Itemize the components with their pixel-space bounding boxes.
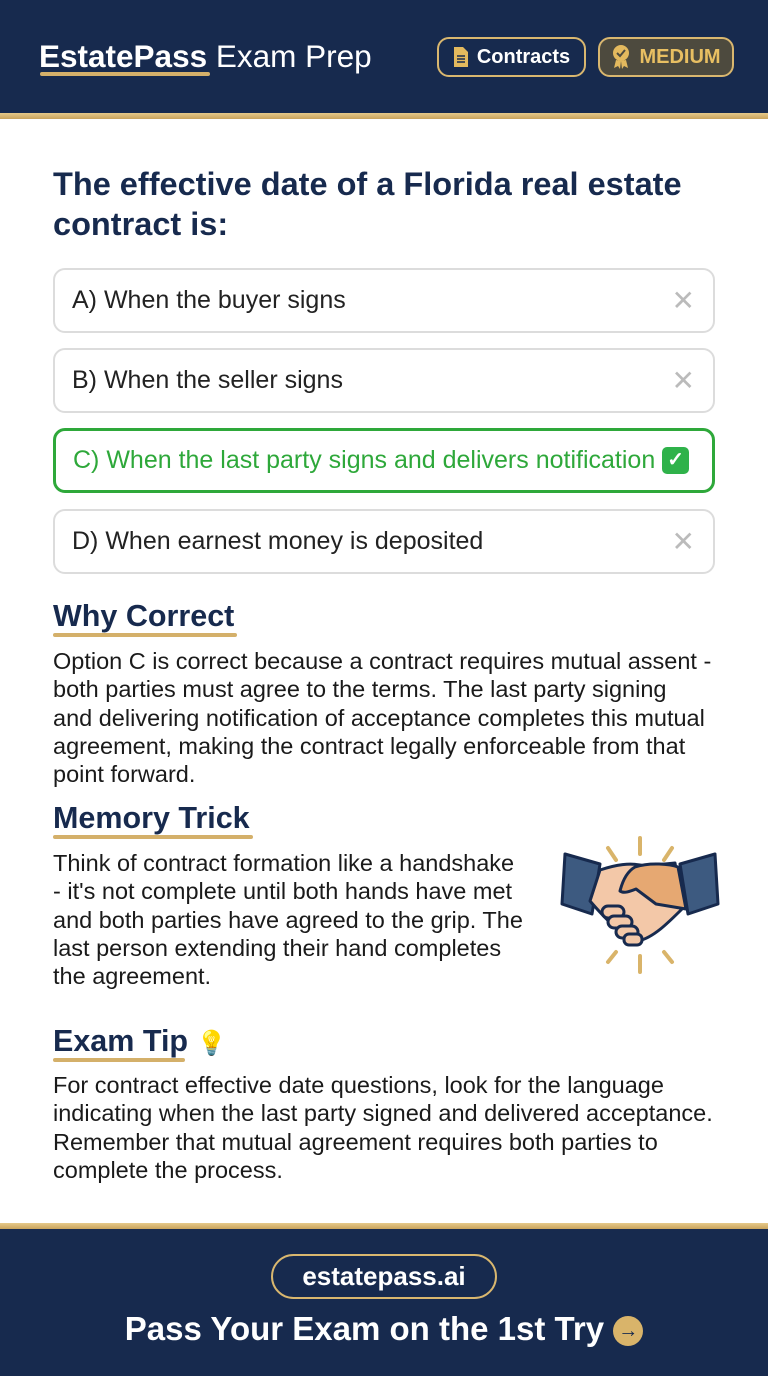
badge: medium: MEDIUM xyxy=(639,46,721,68)
heading: why correct: Why Correct xyxy=(53,599,234,633)
text: why correct: point forward. xyxy=(53,761,195,787)
text: exam tip: Remember that mutual agreement requires both parties to xyxy=(53,1129,658,1155)
url pill xyxy=(271,1254,497,1299)
question heading: The effective date of a Florida real estate xyxy=(53,166,682,202)
option C correct: ✓ xyxy=(667,449,684,471)
option C correct xyxy=(53,428,715,493)
option A: ✕ xyxy=(672,285,695,316)
text: why correct: both parties must agree to the terms. The last party signing xyxy=(53,676,666,702)
question heading: contract is: xyxy=(53,206,228,242)
text: exam tip: complete the process. xyxy=(53,1157,283,1183)
option D xyxy=(53,509,715,574)
option B: B) When the seller signs xyxy=(72,366,343,394)
text: memory trick: Think of contract formation like a handshake xyxy=(53,850,514,876)
text: memory trick: - it's not complete until both hands have met xyxy=(53,878,512,904)
text: exam tip: indicating when the last party signed and delivered acceptance. xyxy=(53,1100,713,1126)
logo underline xyxy=(40,72,210,76)
text: exam tip xyxy=(53,1072,713,1183)
option B xyxy=(53,348,715,413)
badge: contracts: Contracts xyxy=(477,46,570,68)
heading: exam tip: Exam Tip 💡 xyxy=(53,1024,226,1058)
tagline: Pass Your Exam on the 1st Try xyxy=(125,1310,604,1347)
badge: contracts xyxy=(437,37,586,77)
url pill: estatepass.ai xyxy=(302,1261,466,1291)
text: exam tip: For contract effective date questions, look for the language xyxy=(53,1072,664,1098)
badge: medium xyxy=(598,37,734,77)
header bar xyxy=(0,0,768,113)
text: memory trick: the agreement. xyxy=(53,963,211,989)
text: memory trick: and both parties have agreed to the grip. The xyxy=(53,907,523,933)
icon: handshake xyxy=(560,836,720,974)
tagline: → xyxy=(618,1320,638,1342)
text: why correct: Option C is correct because a contract requires mutual assent - xyxy=(53,648,711,674)
heading: memory trick: Memory Trick xyxy=(53,801,250,835)
option D: ✕ xyxy=(672,526,695,557)
text: why correct: and delivering notification of acceptance completes this mutual xyxy=(53,705,705,731)
option B: ✕ xyxy=(672,365,695,396)
text: why correct: agreement, making the contract legally enforceable from that xyxy=(53,733,685,759)
text: why correct xyxy=(53,648,711,787)
option D: D) When earnest money is deposited xyxy=(72,527,483,555)
option C correct: C) When the last party signs and delivers notification xyxy=(73,446,655,474)
option A xyxy=(53,268,715,333)
question heading xyxy=(53,166,682,242)
option A: A) When the buyer signs xyxy=(72,286,346,314)
footer xyxy=(0,1229,768,1376)
logo title: EstatePass Exam Prep xyxy=(39,38,372,74)
text: memory trick: last person extending their hand completes xyxy=(53,935,501,961)
text: memory trick xyxy=(53,850,523,989)
